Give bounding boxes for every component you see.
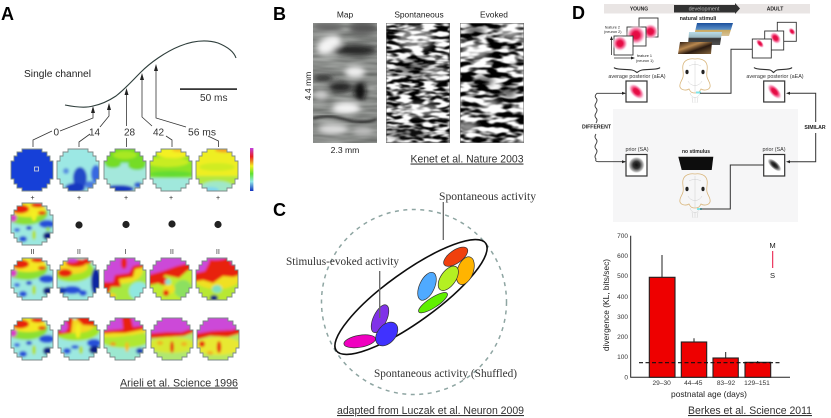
connector to adult prior <box>700 165 764 209</box>
young posterior stack <box>612 18 658 55</box>
colour scale <box>250 148 253 191</box>
column titles: Spontaneous <box>394 10 444 20</box>
y ticks: 700 <box>617 233 628 240</box>
panel C: activity manifold diagram <box>273 191 536 417</box>
plus signs <box>30 195 220 202</box>
mouse brain top <box>680 59 710 103</box>
brace young <box>614 68 660 72</box>
leader lines <box>380 202 443 318</box>
natural stimuli photos: natural stimuli <box>680 16 717 22</box>
plus signs: + <box>169 195 173 202</box>
axes <box>631 236 790 377</box>
young axes: (neuron 2) <box>604 30 622 34</box>
scale label: 50 ms <box>200 93 228 104</box>
plus signs: + <box>124 195 128 202</box>
label: spontaneous activity: Spontaneous activity <box>439 191 536 203</box>
shuffled activity circle <box>322 210 506 394</box>
time labels: 14 <box>89 128 101 138</box>
header band <box>604 3 810 14</box>
M-S scale <box>769 241 776 280</box>
citation B: Kenet et al. Nature 2003 <box>410 154 524 166</box>
heading A: A <box>1 4 14 24</box>
young axes <box>604 26 654 63</box>
brace adult <box>754 68 792 72</box>
young average posterior <box>625 80 648 103</box>
bars <box>649 277 771 377</box>
x tick labels: 29–30 <box>653 380 671 387</box>
time labels: 28 <box>124 128 136 138</box>
y ticks: 500 <box>617 273 628 280</box>
time labels: 0 <box>54 128 60 138</box>
adult posterior stack <box>752 22 797 58</box>
axis label: height: 4.4 mm <box>303 72 313 100</box>
adult average posterior <box>764 81 785 102</box>
y ticks: 100 <box>617 354 628 361</box>
y ticks: 600 <box>617 253 628 260</box>
y ticks: 0 <box>624 374 628 382</box>
SIMILAR connector: SIMILAR <box>804 125 826 131</box>
gray no-stimulus panel <box>613 109 798 222</box>
time labels: 56 ms <box>188 128 216 138</box>
single channel trace <box>65 41 236 107</box>
evoked activity image <box>460 23 524 143</box>
bar chart: divergence by age <box>601 233 812 417</box>
label: stimulus-evoked activity: Stimulus-evoked activity <box>286 256 399 268</box>
x tick labels <box>653 380 770 387</box>
panel A: optical imaging maps <box>1 4 253 390</box>
heading C: C <box>273 200 286 220</box>
y axis title: divergence (KL, bits/sec) <box>601 259 611 351</box>
young prior <box>626 154 647 176</box>
panel B: map, spontaneous, evoked <box>273 4 524 166</box>
coloured activity clusters <box>343 243 478 350</box>
x tick labels: 83–92 <box>717 380 735 387</box>
SIMILAR connector <box>786 92 826 163</box>
label: single channel: Single channel <box>24 69 91 80</box>
time arrows <box>33 64 218 147</box>
y ticks: 300 <box>617 314 628 321</box>
young axes: feature 1 <box>637 54 652 58</box>
header band: ADULT <box>767 7 783 13</box>
young axes: (neuron 1) <box>636 59 654 63</box>
column titles: Map <box>337 10 353 20</box>
label: prior adult: prior (SA) <box>762 147 786 153</box>
spontaneous activity image <box>386 23 450 143</box>
header band: YOUNG <box>630 7 648 13</box>
heading D: D <box>572 3 585 23</box>
plus signs: + <box>77 195 81 202</box>
time labels: 42 <box>153 128 165 138</box>
column titles <box>337 10 508 20</box>
error bars <box>662 255 758 362</box>
label: prior young: prior (SA) <box>625 147 649 153</box>
DIFFERENT connector <box>582 92 626 163</box>
dashed baseline <box>639 362 780 364</box>
axis label: width: 2.3 mm <box>331 145 359 155</box>
map row 3 <box>10 258 238 300</box>
y ticks: 200 <box>617 334 628 341</box>
no stimulus label: no stimulus <box>682 149 710 155</box>
mouse brain bottom <box>680 174 710 218</box>
x tick labels: 129–151 <box>744 380 770 387</box>
y ticks: 400 <box>617 294 628 301</box>
map row 1 <box>10 148 238 192</box>
DIFFERENT connector: DIFFERENT <box>582 124 612 130</box>
map row 4 <box>10 318 240 360</box>
label: shuffled: Spontaneous activity (Shuffled) <box>374 368 517 380</box>
citation D: Berkes et al. Science 2011 <box>688 405 812 417</box>
M-S scale: M <box>769 241 776 250</box>
y ticks <box>617 233 628 382</box>
column titles: Evoked <box>480 10 508 20</box>
plus signs: + <box>30 195 35 202</box>
scale bar <box>180 88 237 90</box>
equals signs <box>31 249 219 254</box>
header band: development <box>689 7 720 13</box>
citation C: adapted from Luczak et al. Neuron 2009 <box>337 405 524 417</box>
young axes: feature 2 <box>605 26 620 30</box>
citation A: Arieli et al. Science 1996 <box>120 378 238 390</box>
plus signs: + <box>216 195 220 202</box>
blank screen <box>678 157 713 170</box>
heading B: B <box>273 4 286 24</box>
label: average posterior young: average posterior (aEA) <box>608 74 666 80</box>
stimulus-off dots <box>75 220 222 229</box>
natural stimuli photos <box>678 16 733 54</box>
x tick labels: 44–45 <box>684 380 703 387</box>
ongoing activity map <box>10 202 54 246</box>
M-S scale: S <box>770 271 775 280</box>
x axis title: postnatal age (days) <box>671 389 747 399</box>
connector to adult posteriors <box>700 49 752 93</box>
panel D: development model diagram <box>572 3 826 222</box>
spontaneous activity ellipse <box>322 223 500 371</box>
label: average posterior adult: average posterior (aEA) <box>746 74 804 80</box>
adult prior <box>764 154 785 176</box>
orientation map image <box>313 23 377 143</box>
time labels <box>54 128 216 138</box>
